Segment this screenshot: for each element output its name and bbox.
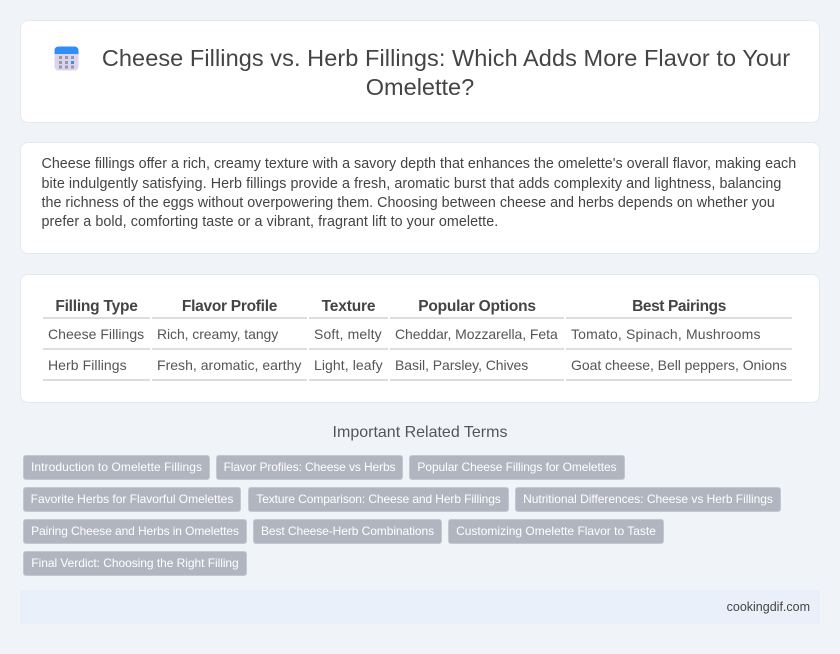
tag	[23, 519, 247, 544]
title text: Cheese Fillings vs. Herb Fillings: Which Adds More Flavor to Your	[102, 45, 790, 71]
row: herb fillings: Herb Fillings	[48, 357, 127, 373]
row: cheese fillings: Tomato, Spinach, Mushrooms	[571, 326, 761, 342]
comparison table	[43, 298, 792, 381]
row: herb fillings	[48, 357, 787, 373]
tag	[23, 455, 210, 480]
panel: title	[20, 20, 820, 123]
tag: Customizing Omelette Flavor to Taste	[456, 524, 656, 538]
tag	[23, 551, 247, 576]
table header: Filling Type	[55, 298, 138, 315]
row: herb fillings: Light, leafy	[314, 357, 383, 373]
tag: Pairing Cheese and Herbs in Omelettes	[31, 524, 239, 538]
tag: Final Verdict: Choosing the Right Filling	[31, 556, 239, 570]
paragraph text: the richness of the eggs without overpowering them. Choosing between cheese and herbs depends on whether you	[42, 195, 775, 211]
tag: Texture Comparison: Cheese and Herb Fillings	[256, 492, 501, 506]
tag: Popular Cheese Fillings for Omelettes	[417, 460, 617, 474]
paragraph text: Cheese fillings offer a rich, creamy texture with a savory depth that enhances the omelette's overall flavor, making each	[42, 156, 796, 172]
paragraph text	[42, 156, 796, 230]
heading: related terms: Important Related Terms	[333, 424, 507, 441]
tag	[216, 455, 403, 480]
footer source text: cookingdif.com	[727, 600, 810, 614]
row: cheese fillings	[48, 326, 761, 342]
tag	[409, 455, 625, 480]
tag	[515, 487, 781, 512]
tag: Best Cheese-Herb Combinations	[261, 524, 434, 538]
icon: calendar	[54, 46, 78, 70]
related term tags	[23, 455, 781, 576]
tag	[448, 519, 664, 544]
tag	[253, 519, 442, 544]
row: cheese fillings: Soft, melty	[314, 326, 382, 342]
row: cheese fillings: Cheddar, Mozzarella, Feta	[395, 326, 558, 342]
table header: Best Pairings	[632, 298, 726, 315]
tag	[23, 487, 241, 512]
table header: Texture	[322, 298, 375, 315]
tag	[248, 487, 509, 512]
table header: Popular Options	[418, 298, 536, 315]
panel: comparison table	[20, 274, 820, 403]
tag: Flavor Profiles: Cheese vs Herbs	[224, 460, 395, 474]
panel: intro paragraph	[20, 142, 820, 254]
paragraph text: prefer a bold, comforting taste or a vibrant, fragrant lift to your omelette.	[42, 214, 498, 230]
tag: Favorite Herbs for Flavorful Omelettes	[31, 492, 233, 506]
row: herb fillings: Goat cheese, Bell peppers, Onions	[571, 357, 787, 373]
footer bar	[20, 590, 820, 624]
title text	[102, 45, 790, 100]
tag: Nutritional Differences: Cheese vs Herb Fillings	[523, 492, 773, 506]
row: herb fillings: Fresh, aromatic, earthy	[157, 357, 301, 373]
row: cheese fillings: Cheese Fillings	[48, 326, 144, 342]
tag: Introduction to Omelette Fillings	[31, 460, 202, 474]
title text: Omelette?	[366, 74, 474, 100]
row: herb fillings: Basil, Parsley, Chives	[395, 357, 528, 373]
paragraph text: bite indulgently satisfying. Herb fillings provide a fresh, aromatic burst that adds complexity and lightness, balancing	[42, 176, 781, 192]
table header: Flavor Profile	[182, 298, 277, 315]
row: cheese fillings: Rich, creamy, tangy	[157, 326, 278, 342]
table header	[55, 298, 726, 315]
